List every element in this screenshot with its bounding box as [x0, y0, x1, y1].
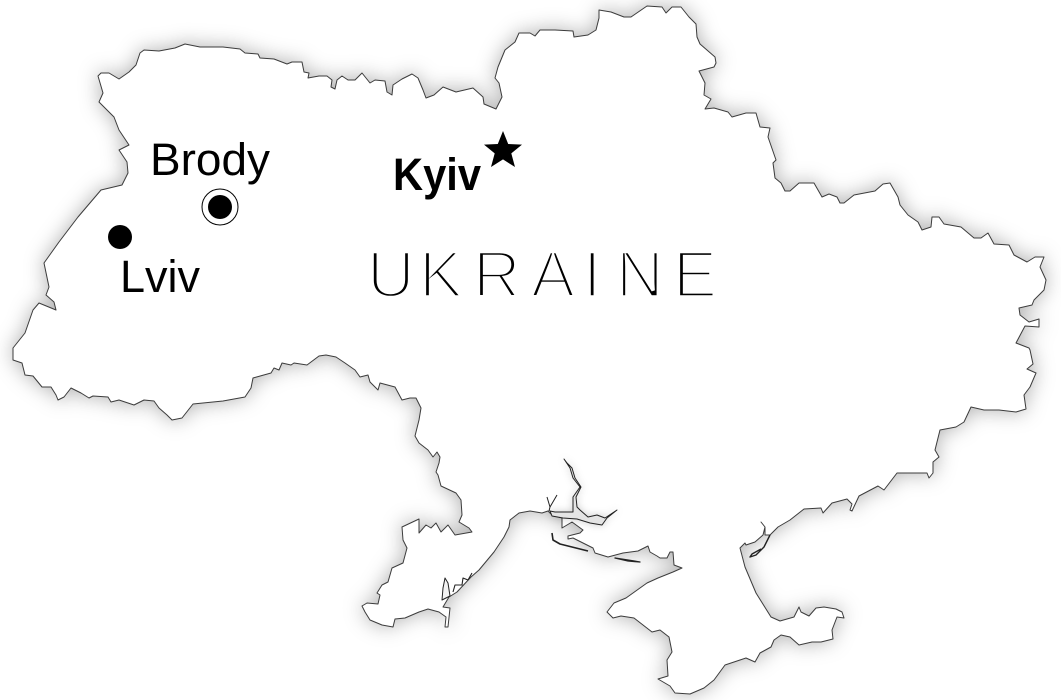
label: Brody: Brody: [150, 134, 271, 185]
label: Kyiv: Kyiv: [393, 149, 481, 200]
Kakhovka reservoir: [550, 459, 617, 525]
marker: Brody: [202, 189, 238, 225]
water features: [442, 459, 770, 600]
marker: Lviv: [108, 225, 132, 249]
Kinburn spit: [552, 533, 588, 551]
Budjak lagoons: [453, 573, 472, 592]
title: UKRAINE: UKRAINE: [367, 237, 717, 311]
Dnieper branch: [547, 495, 557, 511]
Dniester liman: [442, 578, 450, 600]
Dzharylhach island: [615, 558, 640, 562]
Arabat spit: [750, 535, 770, 557]
label: Lviv: Lviv: [120, 251, 200, 302]
icon: capital star: [484, 131, 522, 167]
